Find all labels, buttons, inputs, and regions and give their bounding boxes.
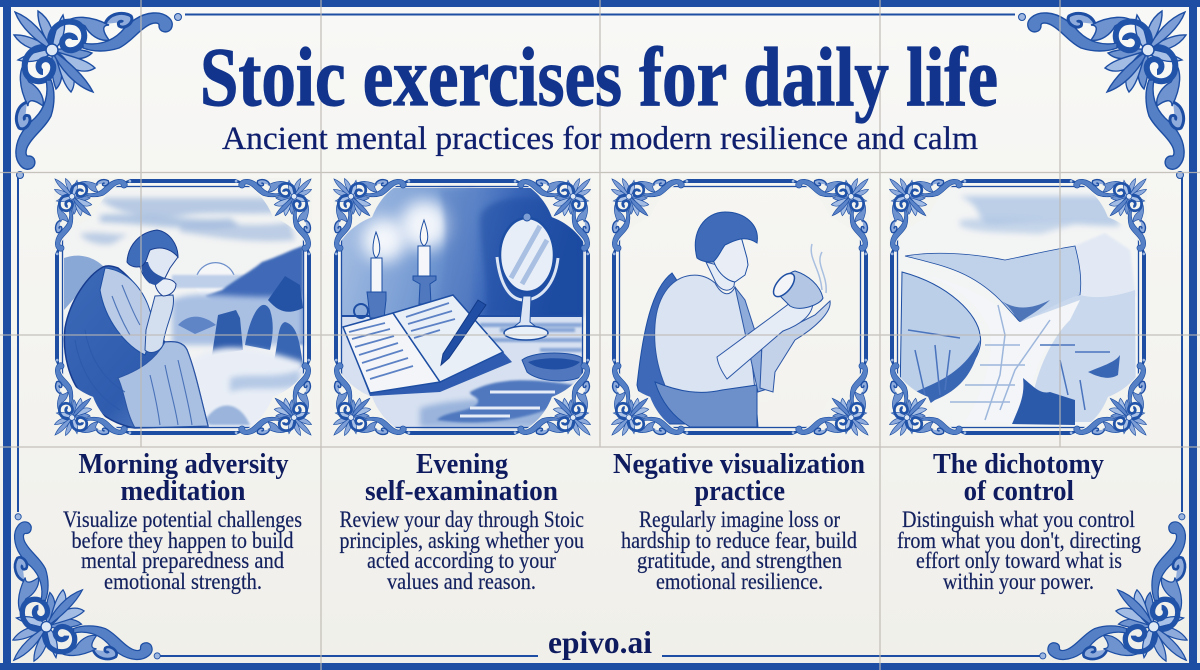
- corner ornament: bottom left: [13, 514, 160, 661]
- bowl and water: [437, 353, 582, 422]
- seated philosopher: [64, 230, 208, 428]
- heading: [365, 448, 558, 507]
- description: from what you don't, directing: [897, 528, 1141, 553]
- corner ornament: bottom right: [1040, 514, 1187, 661]
- card text: morning adversity meditation: [63, 448, 302, 594]
- panel: evening self-examination illustration: [333, 178, 591, 436]
- description: emotional resilience.: [656, 569, 823, 594]
- card text: the dichotomy of control: [897, 448, 1141, 594]
- subtitle: Ancient mental practices for modern resilience and calm: [222, 121, 978, 157]
- heading: [78, 448, 289, 507]
- table: [342, 316, 582, 427]
- open book and pen: [343, 295, 512, 396]
- description: acted according to your: [367, 548, 556, 573]
- card text: negative visualization practice: [613, 448, 865, 594]
- foreground grasses: [908, 330, 1120, 425]
- heading: meditation: [120, 475, 246, 507]
- description: mental preparedness and: [81, 548, 284, 573]
- description: [63, 507, 302, 594]
- heading: [933, 448, 1104, 507]
- heading: practice: [694, 475, 785, 507]
- panel: morning adversity illustration: [54, 178, 312, 436]
- description: Review your day through Stoic: [340, 507, 584, 532]
- distant hills and figures: [172, 246, 303, 428]
- description: hardship to reduce fear, build: [621, 528, 857, 553]
- mirror: [497, 213, 558, 340]
- corner ornament: top left: [14, 11, 182, 178]
- title: Stoic exercises for daily life: [200, 31, 998, 124]
- panel: dichotomy of control illustration: [889, 178, 1147, 436]
- footer brand: epivo.ai: [548, 624, 652, 660]
- candles: [354, 220, 436, 318]
- description: Distinguish what you control: [902, 507, 1135, 532]
- description: Visualize potential challenges: [63, 507, 302, 532]
- corner ornament: top right: [1018, 11, 1186, 178]
- description: emotional strength.: [104, 569, 262, 594]
- heading: of control: [964, 475, 1074, 507]
- panel: negative visualization illustration: [611, 178, 869, 436]
- man holding a vessel: [637, 212, 830, 427]
- description: within your power.: [943, 569, 1094, 594]
- description: Regularly imagine loss or: [639, 507, 840, 532]
- description: before they happen to build: [72, 528, 294, 553]
- description: effort only toward what is: [916, 548, 1122, 573]
- heading: self-examination: [365, 475, 558, 507]
- heading: Evening: [416, 448, 508, 480]
- heading: Morning adversity: [78, 448, 289, 480]
- description: [621, 507, 857, 594]
- candlelit wall: [342, 188, 582, 318]
- heading: The dichotomy: [933, 448, 1104, 480]
- heading: [613, 448, 865, 507]
- description: values and reason.: [387, 569, 536, 594]
- description: [897, 507, 1141, 594]
- heading: Negative visualization: [613, 448, 865, 480]
- description: gratitude, and strengthen: [637, 548, 842, 573]
- description: principles, asking whether you: [340, 528, 584, 553]
- landscape: [899, 188, 1139, 428]
- card text: evening self-examination: [340, 448, 584, 594]
- sky and clouds: [63, 188, 303, 428]
- description: [340, 507, 584, 594]
